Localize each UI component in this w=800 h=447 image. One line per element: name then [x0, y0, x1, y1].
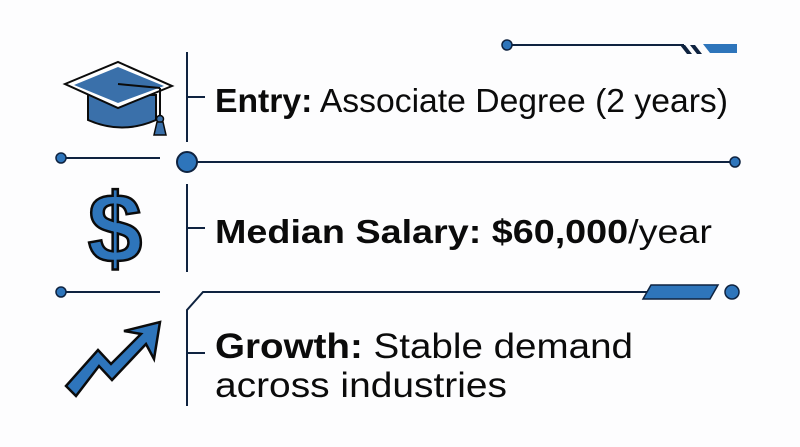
icon: growth arrow — [66, 322, 160, 396]
divider: row 3 bracket — [187, 318, 205, 406]
top decorative connector — [502, 40, 737, 54]
text: growth: Growth: Stable demand — [215, 327, 633, 366]
connector row 2 — [56, 152, 740, 172]
connector row 3 — [56, 285, 739, 318]
text: entry: Entry: Associate Degree (2 years) — [215, 82, 728, 119]
text: growth — [215, 327, 633, 405]
divider: row 1 bracket — [187, 52, 205, 142]
icon: dollar sign: $ — [88, 173, 142, 283]
divider: row 2 bracket — [187, 184, 205, 272]
icon: graduation cap — [65, 62, 172, 135]
text: growth: across industries — [215, 366, 507, 405]
text: salary: Median Salary: $60,000 /year — [215, 213, 712, 250]
